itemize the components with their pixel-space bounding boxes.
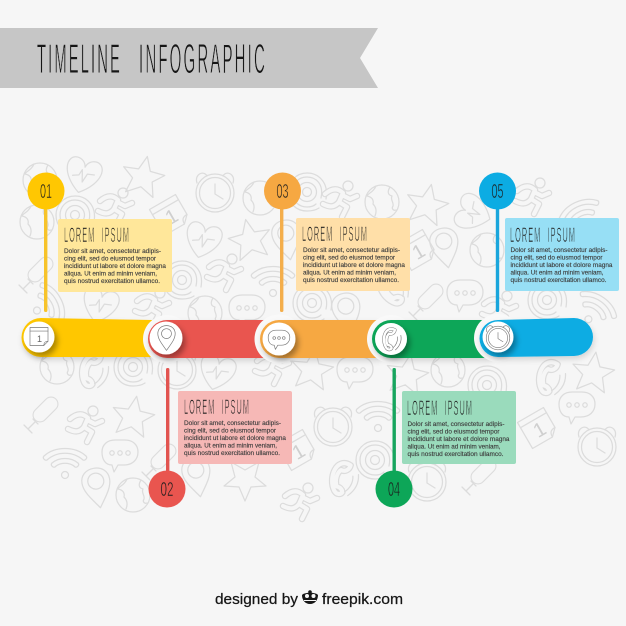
step 01 text card: LOREM IPSUM [64, 224, 130, 247]
step 02 text card: cing elit, sed do eiusmod tempor [184, 428, 277, 434]
step 04 number badge [376, 470, 412, 508]
step 01 text card: quis nostrud exercitation ullamco. [64, 278, 160, 285]
title: TIMELINE [37, 35, 122, 82]
marker: pin icon [150, 322, 182, 354]
step 03 connector [280, 205, 283, 312]
step 05 text card: incididunt ut labore et dolore magna [510, 262, 613, 269]
segment 2: red [148, 320, 270, 358]
step 05 text card: Dolor sit amet, consectetur adipis- [510, 247, 608, 254]
segment 5: blue [480, 318, 593, 357]
step 02 text card: incididunt ut labore et dolore magna [184, 435, 286, 442]
step 01 connector [44, 205, 47, 312]
step 02 text card: aliqua. Ut enim ad minim veniam, [184, 442, 277, 450]
step 03 number badge [264, 172, 301, 210]
footer credit [215, 590, 403, 608]
segment 4: green [372, 320, 490, 358]
step 01 text card: Dolor sit amet, consectetur adipis- [64, 248, 161, 255]
step 01 text card [58, 219, 172, 292]
background doodle pattern: 1 [409, 240, 429, 265]
step 02 text card: quis nostrud exercitation ullamco. [184, 450, 280, 457]
step 03 text card [296, 218, 410, 291]
step 04 text card: Dolor sit amet, consectetur adipis- [408, 421, 504, 428]
step 05 text card: aliqua. Ut enim ad minim veniam, [510, 270, 604, 276]
step 04 text card [402, 391, 516, 464]
step 01 [28, 172, 172, 312]
background doodle pattern [19, 152, 621, 519]
step 02 text card: LOREM IPSUM [184, 396, 250, 419]
step 03 text card: quis nostrud exercitation ullamco. [303, 277, 399, 284]
marker: phone icon [375, 323, 407, 355]
title banner: INFOGRAPHIC [139, 35, 267, 82]
icon: freepik logo [302, 590, 318, 604]
step 04 number badge: 04 [388, 479, 400, 501]
title banner [0, 28, 378, 88]
step 04 [376, 368, 516, 508]
step 04 text card: quis nostrud exercitation ullamco. [408, 451, 504, 458]
step 02 connector [166, 368, 169, 473]
step 05 text card: cing elit, sed do eiusmod tempor [510, 254, 603, 262]
footer credit: designed by [215, 591, 299, 608]
step 02 number badge: 02 [160, 479, 174, 501]
step 05 text card: quis nostrud exercitation ullamco. [510, 277, 607, 284]
step 04 text card: cing elit, sed do eiusmod tempor [408, 428, 500, 436]
step 04 text card: LOREM IPSUM [407, 397, 473, 420]
marker: chat bubble icon [262, 322, 296, 356]
step 01 number badge: 01 [40, 181, 52, 203]
marker: calendar icon: 1 [37, 334, 42, 344]
step 05 [479, 172, 619, 312]
step 02 text card: Dolor sit amet, consectetur adipis- [184, 420, 281, 427]
step 05 number badge: 05 [492, 181, 504, 203]
step 03 [264, 172, 410, 312]
step 01 text card: aliqua. Ut enim ad minim veniam, [64, 270, 157, 278]
step 02 [148, 368, 292, 508]
background doodle pattern: 1 [289, 440, 309, 465]
step 01 text card: cing elit, sed do eiusmod tempor [64, 256, 157, 262]
step 05 text card [505, 218, 619, 291]
segment 3: orange [260, 320, 380, 358]
timeline bar [22, 314, 593, 364]
step 03 text card: cing elit, sed do eiusmod tempor [303, 254, 396, 262]
marker: calendar icon [24, 322, 54, 352]
step 03 number badge: 03 [276, 181, 288, 203]
step 02 text card [178, 391, 292, 464]
step 05 connector [496, 205, 499, 312]
step 01 number badge [28, 172, 64, 210]
step 03 text card: incididunt ut labore et dolore magna [303, 262, 405, 269]
marker: alarm clock icon [482, 322, 514, 352]
step 01 text card: incididunt ut labore et dolore magna [64, 263, 166, 270]
step 04 connector [392, 368, 396, 473]
step 04 text card: aliqua. Ut enim ad minim veniam, [408, 444, 501, 450]
step 03 text card: Dolor sit amet, consectetur adipis- [303, 247, 400, 254]
background doodle pattern: 1 [530, 418, 550, 443]
step 03 text card: LOREM IPSUM [302, 223, 368, 246]
segment 1: yellow [22, 318, 152, 357]
step 02 number badge [148, 470, 186, 508]
step 04 text card: incididunt ut labore et dolore magna [408, 436, 510, 443]
step 03 text card: aliqua. Ut enim ad minim veniam, [303, 270, 396, 276]
footer credit: freepik.com [322, 591, 403, 608]
background doodle pattern: 1 [162, 205, 182, 230]
